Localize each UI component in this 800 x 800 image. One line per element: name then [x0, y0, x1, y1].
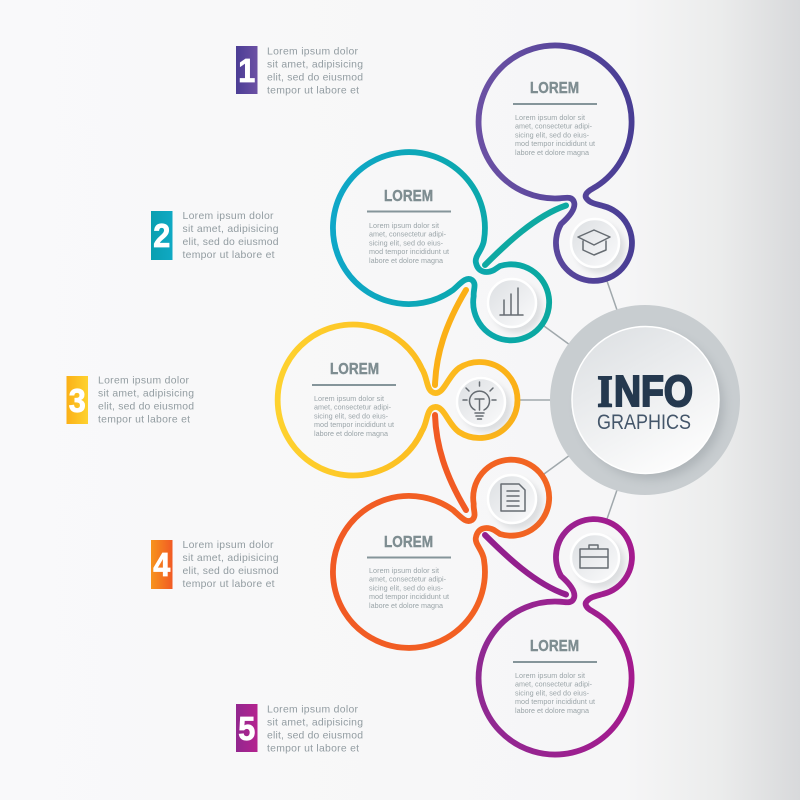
number badge 3: [66, 376, 88, 424]
connector lines to hub: [519, 281, 617, 519]
outline: purple: [479, 45, 632, 281]
body text: Lorem ipsum dolor sit: [515, 671, 585, 680]
body text: Lorem ipsum dolor sit: [369, 221, 439, 230]
legend item 2: [151, 211, 279, 261]
body text: mod tempor incididunt ut: [369, 592, 449, 601]
heading rule: [513, 661, 597, 663]
legend text 1: elit, sed do eiusmod: [267, 72, 363, 84]
icon: light bulb: [457, 378, 511, 432]
legend text 5: [267, 704, 363, 754]
heading rule: [367, 210, 451, 212]
body text: Lorem ipsum dolor sit: [314, 394, 384, 403]
heading: LOREM: [530, 80, 579, 97]
heading rule: [367, 556, 451, 558]
body text: sicing elit, sed do eius-: [515, 130, 590, 139]
legend text 1: Lorem ipsum dolor: [267, 46, 359, 58]
legend text 2: Lorem ipsum dolor: [182, 211, 274, 222]
body text: [369, 221, 449, 265]
body text: labore et dolore magna: [314, 429, 388, 438]
body text: mod tempor incididunt ut: [515, 139, 595, 148]
body text: amet, consectetur adipi-: [314, 403, 392, 412]
body text: sicing elit, sed do eius-: [369, 583, 444, 592]
hub subtitle GRAPHICS: GRAPHICS: [597, 411, 691, 434]
legend item 4: [151, 540, 279, 590]
legend text 1: [267, 46, 363, 96]
body text: amet, consectetur adipi-: [369, 575, 447, 584]
icon: briefcase: [571, 534, 625, 588]
body text: amet, consectetur adipi-: [515, 680, 593, 689]
body text: [314, 394, 394, 438]
body text: Lorem ipsum dolor sit: [369, 566, 439, 575]
body text: labore et dolore magna: [369, 256, 443, 265]
icon: bar chart: [488, 279, 542, 333]
body text: mod tempor incididunt ut: [314, 420, 394, 429]
panel: step 4 node: [333, 460, 549, 648]
arrow: orange tail: [435, 415, 466, 510]
legend text 4: sit amet, adipisicing: [182, 553, 279, 564]
legend item 3: [66, 376, 194, 426]
body text: mod tempor incididunt ut: [369, 247, 449, 256]
outline: yellow: [278, 324, 517, 476]
heading: LOREM: [530, 638, 579, 655]
panel: step 3 node: [278, 324, 517, 476]
heading: LOREM: [384, 188, 433, 205]
body text: mod tempor incididunt ut: [515, 697, 595, 706]
arrow: teal tail: [485, 206, 566, 265]
legend text 1: sit amet, adipisicing: [267, 60, 363, 70]
heading rule: [312, 384, 396, 386]
heading: LOREM: [330, 361, 379, 378]
legend text 5: tempor ut labore et: [267, 744, 359, 754]
hub title INFO: I: [598, 367, 612, 416]
legend text 5: sit amet, adipisicing: [267, 718, 363, 728]
legend text 1: tempor ut labore et: [267, 86, 359, 96]
legend item 1: 1: [238, 52, 255, 89]
hub outer ring: [550, 305, 740, 495]
arrow: yellow tail: [435, 290, 466, 385]
legend text 3: sit amet, adipisicing: [98, 388, 194, 400]
legend item 4: 4: [153, 546, 171, 583]
heading rule: [513, 103, 597, 105]
body text: labore et dolore magna: [369, 601, 443, 610]
legend text 5: Lorem ipsum dolor: [267, 704, 359, 716]
body text: Lorem ipsum dolor sit: [515, 113, 585, 122]
legend text 3: [98, 376, 194, 426]
legend item 3: 3: [69, 382, 86, 419]
legend text 2: elit, sed do eiusmod: [182, 237, 279, 248]
outline: magenta: [479, 519, 632, 755]
panel: step 1 node: [479, 45, 632, 281]
legend text 2: sit amet, adipisicing: [182, 224, 279, 235]
legend item 2: 2: [153, 217, 170, 254]
hub title INFO: NFO: [614, 367, 693, 416]
legend text 4: Lorem ipsum dolor: [182, 540, 274, 551]
arrow: magenta tail: [485, 535, 566, 594]
heading: LOREM: [384, 534, 433, 551]
legend text 4: [182, 540, 279, 590]
legend item 5: [236, 704, 363, 754]
outline: teal: [333, 152, 549, 340]
icon: graduation cap: [571, 219, 625, 273]
panel: step 5 node: [479, 519, 632, 755]
body text: sicing elit, sed do eius-: [314, 411, 389, 420]
number badge 1: [236, 46, 258, 94]
body text: amet, consectetur adipi-: [515, 122, 593, 131]
number badge 5: [236, 704, 258, 752]
body text: [369, 566, 449, 610]
outline: orange: [333, 460, 549, 648]
legend text 5: elit, sed do eiusmod: [267, 730, 363, 742]
legend text 2: [182, 211, 279, 261]
legend item 1: [236, 46, 363, 96]
body text: labore et dolore magna: [515, 148, 589, 157]
number badge 2: [151, 211, 172, 260]
hub disc: [572, 326, 719, 474]
legend text 3: Lorem ipsum dolor: [98, 376, 190, 386]
body text: [515, 671, 595, 715]
body text: amet, consectetur adipi-: [369, 230, 447, 239]
legend text 3: elit, sed do eiusmod: [98, 402, 194, 412]
number badge 4: [151, 540, 172, 589]
legend text 2: tempor ut labore et: [182, 250, 275, 261]
legend text 4: elit, sed do eiusmod: [182, 566, 279, 577]
icon: document: [488, 475, 542, 529]
body text: [515, 113, 595, 157]
legend text 3: tempor ut labore et: [98, 414, 190, 426]
body text: sicing elit, sed do eius-: [369, 238, 444, 247]
legend item 5: 5: [238, 710, 255, 747]
legend text 4: tempor ut labore et: [182, 579, 275, 590]
body text: labore et dolore magna: [515, 706, 589, 715]
central hub: [550, 305, 740, 495]
hub shadow: [578, 333, 724, 479]
panel: step 2 node: [333, 152, 549, 340]
body text: sicing elit, sed do eius-: [515, 688, 590, 697]
